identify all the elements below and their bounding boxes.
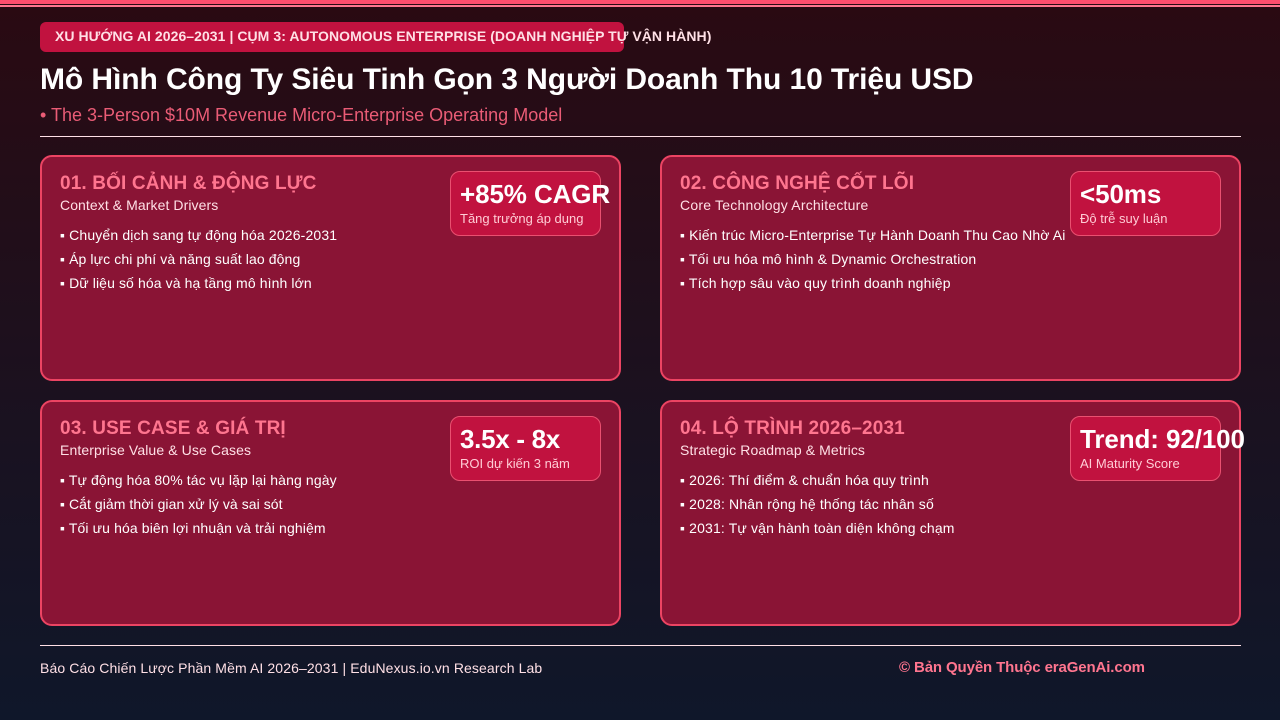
bullet: margin: ▪ Tối ưu hóa biên lợi nhuận và trải nghiệm [60, 520, 326, 536]
panel: context and drivers [40, 155, 621, 381]
bullet: 2026 milestone: ▪ 2026: Thí điểm & chuẩn hóa quy trình [680, 472, 929, 488]
bullet: 2031 milestone: ▪ 2031: Tự vận hành toàn diện không chạm [680, 520, 955, 536]
bullet: integration: ▪ Tích hợp sâu vào quy trình doanh nghiệp [680, 275, 951, 291]
category tag: XU HƯỚNG AI 2026–2031 | CỤM 3: AUTONOMOUS ENTERPRISE (DOANH NGHIỆP TỰ VẬN HÀNH) [55, 28, 711, 44]
panel heading: technology: 02. CÔNG NGHỆ CỐT LÕI [680, 173, 914, 194]
panel subheading: roadmap: Strategic Roadmap & Metrics [680, 442, 865, 458]
bullet: digital data: ▪ Dữ liệu số hóa và hạ tầng mô hình lớn [60, 275, 312, 291]
panel subheading: technology: Core Technology Architecture [680, 197, 869, 213]
panel subheading: use cases: Enterprise Value & Use Cases [60, 442, 251, 458]
panel: core technology [660, 155, 1241, 381]
metric badge: trend score: AI Maturity Score [1080, 456, 1180, 471]
panel: use cases and value [40, 400, 621, 626]
metric badge: CAGR: +85% CAGR [460, 179, 610, 209]
metric badge: latency: <50ms [1080, 179, 1161, 209]
footer copyright: © Bản Quyền Thuộc eraGenAi.com [899, 659, 1145, 676]
bullet: optimisation: ▪ Tối ưu hóa mô hình & Dynamic Orchestration [680, 251, 976, 267]
metric badge: CAGR [450, 171, 601, 236]
footer source: Báo Cáo Chiến Lược Phần Mềm AI 2026–2031 | EduNexus.io.vn Research Lab [40, 660, 542, 676]
panel heading: roadmap: 04. LỘ TRÌNH 2026–2031 [680, 418, 905, 439]
metric badge: latency: Độ trễ suy luận [1080, 211, 1167, 226]
top accent bar [0, 0, 1280, 7]
bullet: time savings: ▪ Cắt giảm thời gian xử lý và sai sót [60, 496, 283, 512]
bullet: architecture: ▪ Kiến trúc Micro-Enterprise Tự Hành Doanh Thu Cao Nhờ Ai [680, 227, 1065, 243]
metric badge: latency [1070, 171, 1221, 236]
bullet: cost pressure: ▪ Áp lực chi phí và năng suất lao động [60, 251, 300, 267]
metric badge: ROI [450, 416, 601, 481]
panel heading: context: 01. BỐI CẢNH & ĐỘNG LỰC [60, 173, 317, 194]
bullet: 2028 milestone: ▪ 2028: Nhân rộng hệ thống tác nhân số [680, 496, 934, 512]
bullet: automation share: ▪ Tự động hóa 80% tác vụ lặp lại hàng ngày [60, 472, 337, 488]
metric badge: ROI: ROI dự kiến 3 năm [460, 456, 570, 471]
panel subheading: context: Context & Market Drivers [60, 197, 218, 213]
panel: roadmap and metrics [660, 400, 1241, 626]
metric badge: trend score [1070, 416, 1221, 481]
panel heading: use cases: 03. USE CASE & GIÁ TRỊ [60, 418, 286, 439]
title: Mô Hình Công Ty Siêu Tinh Gọn 3 Người Doanh Thu 10 Triệu USD [40, 63, 974, 96]
bullet: automation shift: ▪ Chuyển dịch sang tự động hóa 2026-2031 [60, 227, 337, 243]
category tag [40, 22, 624, 52]
metric badge: CAGR: Tăng trưởng áp dụng [460, 211, 583, 226]
metric badge: ROI: 3.5x - 8x [460, 424, 560, 454]
metric badge: trend score: Trend: 92/100 [1080, 424, 1245, 454]
subtitle: • The 3-Person $10M Revenue Micro-Enterprise Operating Model [40, 105, 562, 125]
